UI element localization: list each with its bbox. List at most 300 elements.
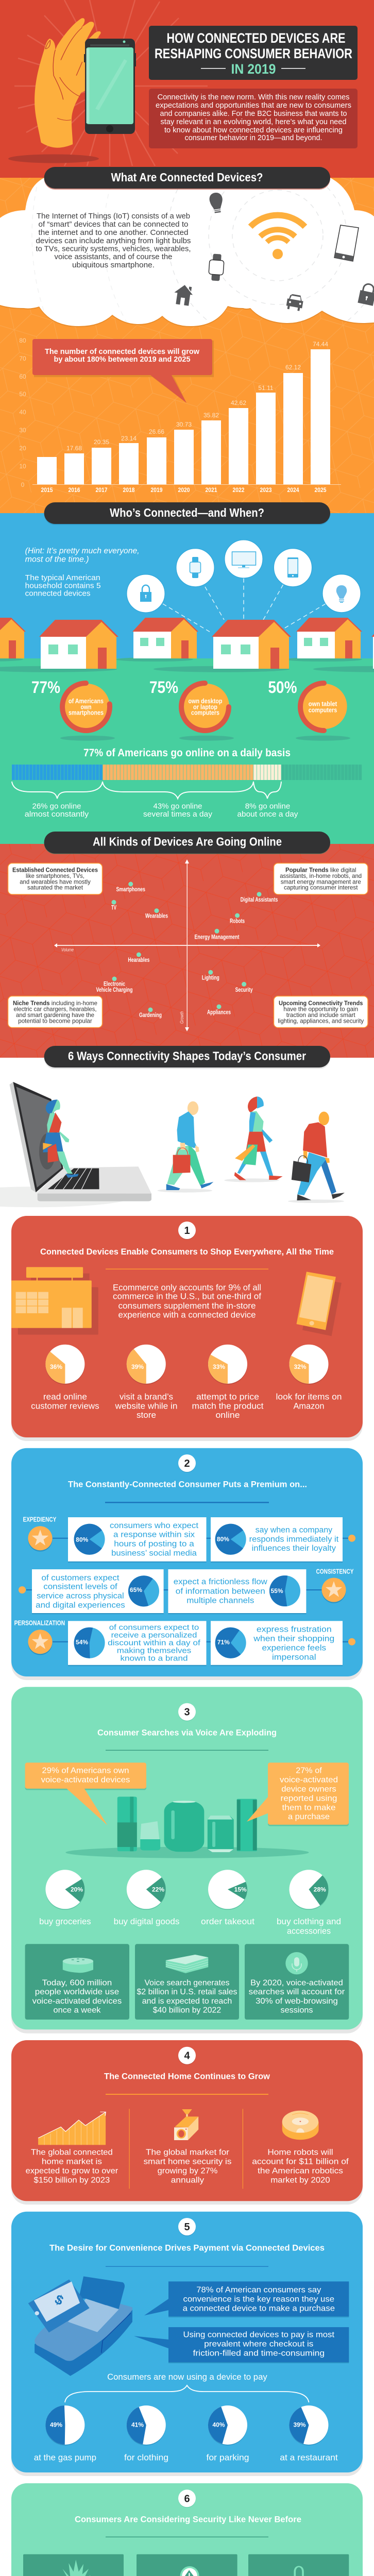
- y axis labels: 50: [19, 391, 26, 398]
- pie: 28% buy clothing: accessories: [287, 1926, 331, 1936]
- quadrant box: popular trends: [274, 863, 368, 894]
- stat: 75% own computers: own desktop: [189, 698, 223, 705]
- text: smart home security: smart home security is: [144, 2158, 231, 2166]
- callout: 27% make purchases: reported using: [280, 1794, 337, 1803]
- device bubble: lock: [127, 574, 165, 613]
- stat card: 71% frustration: impersonal: [272, 1653, 316, 1662]
- quadrant box: upcoming trends: lighting, appliances, and security: [278, 1018, 364, 1025]
- stat card: 65% consistent service: consistent levels of: [43, 1583, 117, 1591]
- bar value labels: 17.68: [66, 445, 82, 452]
- quadrant box: established devices: like smartphones, TVs,: [26, 872, 84, 879]
- quadrant box: niche trends: Niche Trends including in-home: [13, 999, 97, 1007]
- callout: friction-filled checkout: [134, 2327, 349, 2363]
- number badge 4: [178, 2047, 196, 2065]
- intro text box: [149, 89, 358, 148]
- intro text box: expectations and opportunities that are new to consumers: [156, 101, 351, 110]
- stat card: 65% consistent service: of customers expect: [41, 1573, 120, 1582]
- stat card: 55% frictionless: [168, 1569, 306, 1614]
- quadrant box: popular trends: capturing consumer interest: [284, 884, 358, 891]
- stat box: voice search sales: and is expected to reach: [142, 1997, 232, 2006]
- bar value labels: 20.35: [94, 438, 109, 446]
- callout: 29% own devices: [25, 1762, 146, 1825]
- intro text box: to know about how connected devices are influencing: [164, 126, 343, 134]
- stat: 77% own smartphones: smartphones: [69, 709, 104, 717]
- device bubble: watch: [176, 549, 214, 587]
- pie: 36% read reviews: 36%: [50, 1363, 62, 1370]
- y axis labels: 30: [19, 427, 26, 434]
- text: typical household: connected devices: [25, 589, 91, 598]
- pie: 41% clothing: 41%: [131, 2421, 144, 2429]
- stat card: 54% personalized discount: making themselves: [117, 1646, 191, 1655]
- card heading: Consumers Are Considering Security Like Never Before: [75, 2515, 301, 2524]
- card heading: Consumer Searches via Voice Are Exploding: [97, 1728, 277, 1737]
- stat card: 80% loyalty: say when a company: [256, 1526, 332, 1535]
- bar value labels: 23.14: [121, 435, 137, 442]
- text: internet of things definition: [36, 212, 191, 269]
- quadrant box: niche trends: electric car chargers, hearables,: [13, 1006, 97, 1013]
- number badge 1: [178, 1222, 196, 1240]
- card heading: The Connected Home Continues to Grow: [104, 2072, 270, 2081]
- pie: 32% look on Amazon: [276, 1345, 342, 1411]
- pie: 22% digital goods: 22%: [152, 1886, 164, 1893]
- bar value labels: 26.66: [149, 428, 164, 435]
- quadrant data points: Digital Assistants: [241, 897, 278, 903]
- stat card: 54% personalized discount: 54%: [76, 1639, 88, 1646]
- dot: expediency end: [348, 1535, 355, 1542]
- quadrant data points: Hearables: [128, 957, 149, 963]
- stat card: 54% personalized discount: discount within a day of: [108, 1638, 201, 1647]
- icon: light bulb: [209, 192, 224, 214]
- hand shadow: [8, 155, 99, 163]
- callout: 78% convenience: 78% of American consumers say: [196, 2285, 321, 2294]
- year labels: 2024: [287, 486, 299, 494]
- stat card: 55% frictionless: of information between: [176, 1587, 265, 1596]
- number badge 5: [178, 2218, 196, 2236]
- callout: 78% convenience: [144, 2281, 349, 2317]
- text: smart home security: growing by 27%: [158, 2166, 217, 2175]
- stat card: 55% frictionless: 55%: [270, 1587, 283, 1595]
- stat box: data privacy: [248, 2554, 349, 2576]
- icon: microphone: [285, 1952, 308, 1974]
- house: large right edge: [371, 620, 374, 669]
- illustration: smart speakers: [65, 1797, 309, 1858]
- stat box: UK attacks: [23, 2554, 124, 2576]
- text: 26% almost constantly: [25, 802, 89, 819]
- quadrant data points: Robots: [230, 919, 245, 925]
- text: global home market: $150 billion by 2023: [34, 2176, 110, 2185]
- text: global home market: home market is: [42, 2158, 102, 2166]
- quadrant axes: Volume: [61, 947, 74, 953]
- text: global home market: expected to grow to over: [26, 2166, 118, 2175]
- stat box: voice search sales: Voice search generates: [144, 1978, 230, 1987]
- shopper: man with red bag: [158, 1101, 213, 1193]
- intro text box: Connectivity is the new norm. With this new reality comes: [158, 93, 349, 101]
- pie: 32% look on Amazon: Amazon: [294, 1401, 325, 1411]
- text: internet of things definition: to TVs, security systems, vehicles, wearables,: [36, 245, 191, 253]
- quadrant data points: Energy Management: [195, 935, 240, 941]
- pie: 36% read reviews: read online: [43, 1393, 87, 1402]
- pie: 39% visit brand website: visit a brand’s: [120, 1393, 173, 1402]
- pie: 20% buy groceries: 20%: [71, 1886, 83, 1893]
- bar chart: connected devices 2015-2025: [19, 337, 341, 494]
- quadrant box: established devices: [8, 863, 102, 894]
- stat: 75% own computers: [149, 678, 234, 741]
- stat: 50% own tablets: own tablet: [309, 701, 337, 708]
- y axis labels: 60: [19, 373, 26, 380]
- year labels: [41, 486, 327, 494]
- quadrant data points: Vehicle Charging: [96, 987, 133, 993]
- stat box: 600 million: people worldwide use: [35, 1988, 119, 1996]
- callout: 180% growth: by about 180% between 2019 and 2025: [54, 355, 191, 364]
- dot: consistency end: [19, 1586, 26, 1594]
- shopper: woman in screen: [43, 1099, 79, 1178]
- house: large center: [212, 620, 291, 669]
- text: global home market: The global connected: [31, 2148, 113, 2157]
- text: home robots: [252, 2148, 349, 2185]
- card 6: security: [11, 2483, 363, 2576]
- striped bar: online frequency: [12, 765, 362, 780]
- icon: house: [173, 284, 194, 306]
- callout: 78% convenience: convenience is the key reason they use: [183, 2295, 334, 2303]
- stat card: 55% frictionless: multiple channels: [186, 1596, 254, 1605]
- stat box: voice search sales: $40 billion by 2022: [153, 2006, 221, 2015]
- icon: padlock: [288, 2567, 309, 2576]
- section background: hero: [0, 0, 374, 178]
- text: internet of things definition: devices can include anything from light bulbs: [36, 237, 191, 245]
- y axis labels: 20: [19, 445, 26, 452]
- quadrant box: popular trends: smart energy management are: [281, 878, 361, 886]
- quadrant axes: Growth: [179, 1011, 185, 1024]
- quadrant data points: Smartphones: [116, 887, 145, 893]
- stat card: 80% loyalty: responds immediately it: [249, 1535, 339, 1544]
- pie: 15% order takeout: 15%: [234, 1886, 247, 1893]
- text: home robots: account for $11 billion of: [252, 2158, 349, 2166]
- quadrant box: established devices: saturated the market: [27, 884, 83, 891]
- text: global home market: [26, 2148, 118, 2185]
- house: large left: [39, 620, 118, 669]
- icon: security camera: [174, 2109, 198, 2140]
- stat card: 54% personalized discount: of consumers expect to: [109, 1623, 199, 1632]
- stat box: 30% of sessions: [245, 1944, 349, 2020]
- pie: 39% visit brand website: 39%: [131, 1363, 144, 1370]
- number badge 6: 6: [184, 2493, 190, 2504]
- stat card: 54% personalized discount: known to a brand: [121, 1654, 188, 1663]
- stat: 75% own computers: 75%: [149, 678, 178, 697]
- stat card: 80% expect response: [68, 1517, 206, 1563]
- stat card: 65% consistent service: service across physical: [37, 1592, 124, 1601]
- pie: 41% clothing: [124, 2405, 168, 2463]
- quadrant box: upcoming trends: have the opportunity to gain: [283, 1006, 358, 1013]
- year labels: 2016: [68, 486, 80, 494]
- stat card: 65% consistent service: and digital experiences: [36, 1601, 125, 1609]
- callout: friction-filled checkout: friction-filled and time-consuming: [193, 2349, 325, 2358]
- stat: 77% own smartphones: 77%: [31, 678, 60, 697]
- heading: who's connected: [44, 502, 330, 525]
- icon: cash stack: [166, 1955, 208, 1973]
- pie: 39% visit brand website: [114, 1345, 177, 1420]
- stat box: 600 million: Today, 600 million: [42, 1978, 112, 1987]
- device bubble: monitor: [225, 540, 263, 578]
- callout: 27% make purchases: device owners: [281, 1785, 336, 1794]
- heading: what are connected devices: [44, 167, 330, 190]
- quadrant box: niche trends: [8, 996, 102, 1027]
- pie: 40% parking: [206, 2405, 249, 2463]
- pie: 15% order takeout: order takeout: [201, 1917, 254, 1926]
- heading: 6 ways: [44, 1046, 330, 1069]
- intro text box: consumer behavior in 2019—and beyond.: [184, 134, 322, 142]
- y axis labels: 70: [19, 355, 26, 362]
- callout: 78% convenience: a connected device to make a purchase: [183, 2304, 335, 2313]
- icon: car: [286, 293, 304, 311]
- card text: consumers supplement the in-store: [118, 1301, 256, 1311]
- pie: 39% restaurant: 39%: [293, 2421, 306, 2429]
- stat: 50% own tablets: [268, 678, 350, 741]
- dashed connectors from house to devices: [163, 579, 326, 633]
- bar value labels: 74.44: [313, 341, 328, 348]
- stat card: 80% expect response: business’ social media: [111, 1549, 197, 1557]
- stat: 77% own smartphones: of Americans: [69, 698, 104, 705]
- year labels: 2023: [260, 486, 272, 494]
- pie: 33% price match: attempt to price: [196, 1393, 259, 1402]
- number badge 6: [178, 2489, 196, 2507]
- text: 43% several times a day: 43% go online: [154, 802, 202, 810]
- stat: 75% own computers: computers: [191, 709, 219, 717]
- pie: 32% look on Amazon: 32%: [294, 1363, 307, 1370]
- quadrant data points: Lighting: [202, 975, 219, 981]
- phone: [84, 39, 136, 134]
- stat card: 65% consistent service: [32, 1569, 164, 1614]
- quadrant data points: Appliances: [207, 1009, 231, 1015]
- year labels: 2015: [41, 486, 53, 494]
- pie: 39% visit brand website: website while in: [114, 1401, 177, 1411]
- bar value labels: 62.12: [285, 364, 301, 371]
- text: internet of things definition: The Internet of Things (IoT) consists of a web: [37, 212, 190, 221]
- number badge 2: 2: [184, 1458, 190, 1469]
- card text: Ecommerce only accounts for 9% of all: [113, 1283, 261, 1292]
- badge: expediency: [23, 1516, 57, 1552]
- stat card: 71% frustration: 71%: [217, 1639, 230, 1646]
- pie: 15% order takeout: [201, 1870, 254, 1926]
- icon: smart watch: [208, 253, 225, 281]
- icon: wifi: [250, 215, 305, 259]
- stat card: 80% expect response: consumers who expect: [110, 1521, 199, 1530]
- callout: friction-filled checkout: prevalent where checkout is: [204, 2340, 313, 2348]
- stat card: 80% expect response: a response within six: [113, 1531, 195, 1539]
- badge: consistency: CONSISTENCY: [316, 1568, 354, 1575]
- year labels: 2025: [314, 486, 327, 494]
- icon: smartphone: [334, 225, 359, 261]
- stat box: 30% of sessions: sessions: [280, 2006, 313, 2015]
- pie: 28% buy clothing: buy clothing and: [277, 1917, 341, 1926]
- quadrant data points: Electronic: [104, 981, 125, 988]
- year labels: 2021: [205, 486, 217, 494]
- bar value labels: 42.62: [231, 399, 246, 406]
- pie: 40% parking: 40%: [212, 2421, 225, 2429]
- stat: 75% own computers: or laptop: [193, 704, 217, 711]
- text: smart home security: annually: [171, 2176, 204, 2185]
- stat box: voice search sales: [135, 1944, 239, 2020]
- bar value labels: 30.73: [176, 421, 192, 428]
- card 3: voice search: [11, 1687, 363, 2033]
- card text: experience with a connected device: [118, 1310, 256, 1319]
- bar value labels: [66, 341, 328, 452]
- house: small: [132, 618, 198, 658]
- bar value labels: 35.82: [203, 412, 219, 419]
- text: 8% about once a day: [237, 802, 298, 819]
- heading: all kinds of devices: All Kinds of Devices Are Going Online: [93, 835, 282, 849]
- stat card: 71% frustration: experience feels: [262, 1643, 326, 1652]
- year labels: 2017: [96, 486, 108, 494]
- year labels: 2022: [233, 486, 245, 494]
- text: internet of things definition: voice assistants, and of course the: [55, 253, 172, 261]
- quadrant data points: Security: [235, 987, 253, 993]
- stat: 77% own smartphones: [31, 678, 115, 741]
- quadrant data points: TV: [111, 905, 116, 911]
- card text: commerce in the U.S., but one-third of: [113, 1292, 261, 1301]
- text: 26% almost constantly: 26% go online: [32, 802, 81, 810]
- stat card: 71% frustration: when their shopping: [253, 1635, 334, 1643]
- ground shadows under houses: [0, 657, 374, 672]
- heading: who's connected: Who’s Connected—and When?: [110, 506, 264, 519]
- quadrant data points: Wearables: [145, 913, 168, 920]
- stat box: 30% of sessions: By 2020, voice-activated: [250, 1978, 343, 1987]
- number badge 3: [178, 1703, 196, 1721]
- text: smart home security: [144, 2148, 231, 2185]
- text: typical household: household contains 5: [25, 582, 101, 590]
- braces under bar: [12, 782, 281, 799]
- text: smart home security: The global market for: [146, 2148, 230, 2157]
- bar value labels: 51.11: [258, 384, 274, 392]
- stat: 77% own smartphones: own: [80, 704, 92, 711]
- pie: 33% price match: online: [215, 1411, 240, 1420]
- text: 8% about once a day: about once a day: [237, 810, 298, 819]
- pie: 39% restaurant: at a restaurant: [280, 2453, 338, 2463]
- icon: lock: [358, 283, 374, 306]
- text: 43% several times a day: several times a day: [143, 810, 213, 819]
- stat box: 30% of sessions: searches will account for: [249, 1988, 345, 1996]
- stat box: 600 million: once a week: [54, 2006, 101, 2015]
- intro text box: and companies alike. For the B2C business that wants to: [160, 110, 347, 118]
- quadrant box: established devices: Established Connected Devices: [12, 867, 98, 874]
- callout: 29% own devices: voice-activated devices: [41, 1776, 130, 1785]
- quadrant box: upcoming trends: traction and include smart: [286, 1011, 355, 1019]
- house: small far left: [0, 618, 26, 658]
- pie: 28% buy clothing: [277, 1870, 341, 1936]
- quadrant axes: [54, 859, 320, 1031]
- callout: 27% make purchases: a purchase: [288, 1812, 330, 1821]
- bars: [37, 349, 330, 484]
- badge: personalization: PERSONALIZATION: [14, 1620, 65, 1627]
- title box: [149, 26, 358, 80]
- callout: friction-filled checkout: Using connected devices to pay is most: [183, 2331, 335, 2340]
- brace to pies: [65, 2385, 309, 2402]
- sun rays: [14, 0, 208, 166]
- callout: 180% growth: The number of connected devices will grow: [45, 347, 199, 356]
- shopper: man with dark bag: [288, 1112, 345, 1203]
- text: typical household: The typical American: [25, 573, 100, 582]
- shopper: woman with two bags: [224, 1096, 283, 1182]
- stat card: 54% personalized discount: receive a personalized: [111, 1631, 197, 1639]
- pie: 20% buy groceries: [39, 1870, 91, 1926]
- stat card: 80% expect response: hours of posting to a: [114, 1540, 194, 1549]
- card heading: The Constantly-Connected Consumer Puts a Premium on...: [68, 1480, 307, 1489]
- text: 8% about once a day: 8% go online: [245, 802, 290, 810]
- heading: 6 ways: 6 Ways Connectivity Shapes Today’s Consumer: [68, 1049, 306, 1062]
- pie: 40% parking: for parking: [206, 2453, 249, 2463]
- badge: expediency: EXPEDIENCY: [23, 1516, 57, 1523]
- text: consumers using device to pay: Consumers are now using a device to pay: [107, 2372, 267, 2382]
- number badge 4: 4: [184, 2050, 190, 2062]
- text: internet of things definition: the internet and to one another. Connected: [38, 229, 189, 237]
- pie: 49% gas pump: at the gas pump: [34, 2453, 96, 2463]
- column dividers: [129, 2109, 243, 2189]
- stat box: 600 million: [25, 1944, 129, 2020]
- number badge 5: 5: [184, 2222, 190, 2233]
- pie: 36% read reviews: [31, 1345, 99, 1411]
- quadrant box: upcoming trends: Upcoming Connectivity Trends: [279, 999, 363, 1007]
- card text: [113, 1283, 261, 1319]
- hero illustration: hand holding phone: [8, 0, 208, 166]
- stat card: 54% personalized discount: [68, 1621, 206, 1666]
- year labels: 2018: [123, 486, 135, 494]
- quadrant box: niche trends: potential to become popular: [18, 1018, 92, 1025]
- icon: growth chart: [38, 2112, 106, 2145]
- y axis labels: 0: [21, 481, 25, 488]
- number badge 2: [178, 1454, 196, 1472]
- icon: tablet: [297, 1272, 342, 1336]
- pie: 49% gas pump: 49%: [50, 2421, 62, 2429]
- quadrant box: niche trends: and smart gardening have the: [16, 1011, 94, 1019]
- callout: 29% own devices: 29% of Americans own: [42, 1767, 129, 1775]
- pie: 32% look on Amazon: look for items on: [276, 1393, 342, 1402]
- quadrant data points: Gardening: [139, 1012, 162, 1019]
- house: small right: [296, 618, 362, 658]
- callout: 27% make purchases: voice-activated: [280, 1776, 338, 1785]
- section background: connected devices: [0, 178, 374, 513]
- hand: [35, 18, 101, 148]
- callout: 27% make purchases: [247, 1762, 349, 1826]
- stat card: 80% loyalty: 80%: [217, 1536, 229, 1543]
- stat box: voice search sales: $2 billion in U.S. retail sales: [137, 1988, 237, 1996]
- text: 43% several times a day: [143, 802, 213, 819]
- callout: 27% make purchases: 27% of: [296, 1767, 322, 1775]
- pie: 49% gas pump: [34, 2405, 96, 2463]
- pie: 20% buy groceries: buy groceries: [39, 1917, 91, 1926]
- text: home robots: the American robotics: [258, 2166, 343, 2175]
- device bubble: phone: [274, 549, 312, 587]
- card heading: The Desire for Convenience Drives Payment via Connected Devices: [49, 2244, 325, 2253]
- text: 26% almost constantly: almost constantly: [25, 810, 89, 819]
- icon: smart speaker puck: [63, 1958, 93, 1973]
- stat box: detect breaches: [137, 2554, 237, 2576]
- heading: 77% go online daily: 77% of Americans go online on a daily basis: [83, 747, 291, 759]
- stat card: 71% frustration: express frustration: [257, 1625, 332, 1634]
- icon: explosion: [62, 2560, 91, 2576]
- laptop: [0, 1082, 151, 1207]
- pie: 39% visit brand website: store: [137, 1411, 156, 1420]
- icon: storefront: [11, 1267, 98, 1335]
- pie: 33% price match: [192, 1345, 264, 1420]
- intro text box: stay relevant in an evolving world, here’s what you need: [161, 118, 346, 126]
- number badge 1: 1: [184, 1225, 190, 1236]
- text: internet of things definition: ubiquitous smartphone.: [72, 261, 155, 269]
- icon: magnifier with warning: [173, 2566, 199, 2576]
- y axis labels: 80: [19, 337, 26, 344]
- badge: personalization: [14, 1620, 65, 1655]
- stat card: 80% expect response: 80%: [76, 1536, 89, 1544]
- card 4: connected home: [11, 2040, 363, 2205]
- stat box: 30% of sessions: 30% of web-browsing: [256, 1997, 338, 2006]
